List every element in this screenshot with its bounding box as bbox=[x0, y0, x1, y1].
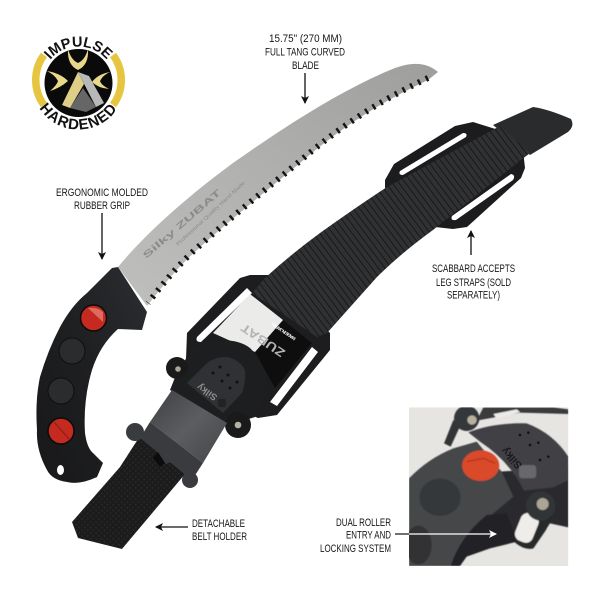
label: blade: 15.75" (270 MM) bbox=[269, 33, 342, 45]
badge: impulse hardened: HARDENED bbox=[40, 102, 115, 130]
label: belt holder: BELT HOLDER bbox=[192, 531, 247, 543]
ribbed body bbox=[252, 126, 530, 337]
inset photo: roller system: Silky bbox=[499, 444, 525, 471]
roller rivet right bbox=[225, 412, 251, 438]
red screw bottom bbox=[48, 418, 74, 444]
label: roller system bbox=[320, 517, 391, 555]
rubber button upper bbox=[59, 338, 85, 364]
badge: impulse hardened bbox=[32, 36, 125, 130]
rivet right centre bbox=[235, 422, 241, 428]
lower frame loops bbox=[185, 275, 330, 418]
blade engraving: Professional Quality Hand Made bbox=[175, 180, 247, 247]
label: blade: BLADE bbox=[292, 60, 319, 72]
arrow: blade bbox=[304, 73, 306, 103]
belt clip frame bbox=[126, 422, 203, 488]
label: roller system: LOCKING SYSTEM bbox=[320, 543, 391, 555]
throat small print: MADE IN JAPAN bbox=[271, 322, 297, 341]
roller rivet left bbox=[166, 357, 188, 379]
rubber button lower bbox=[48, 378, 74, 404]
housing lettering: Silky bbox=[195, 380, 220, 403]
lanyard hole bbox=[57, 465, 64, 475]
upper strap loop bbox=[385, 122, 505, 192]
metal throat dark part bbox=[255, 320, 312, 388]
arrow: roller system bbox=[395, 533, 496, 535]
label: belt holder: DETACHABLE bbox=[192, 518, 245, 530]
inset photo: roller system bbox=[405, 406, 568, 566]
label: grip: RUBBER GRIP bbox=[74, 200, 130, 212]
badge: impulse hardened: IMPULSE bbox=[44, 36, 114, 60]
label: leg straps: SEPARATELY) bbox=[447, 290, 500, 302]
metal throat bright part bbox=[213, 294, 283, 352]
arrow: belt holder bbox=[156, 526, 188, 528]
label: grip bbox=[56, 187, 148, 212]
handle grip bbox=[36, 267, 147, 483]
grey lock cover bbox=[150, 390, 227, 463]
housing label panel bbox=[187, 357, 245, 413]
detachable belt holder bbox=[72, 422, 203, 549]
black dome housing bbox=[170, 340, 267, 425]
scabbard bbox=[150, 107, 572, 463]
blade engraving: Silky ZUBAT bbox=[141, 187, 223, 261]
label: grip: ERGONOMIC MOLDED bbox=[56, 187, 148, 199]
label: belt holder bbox=[192, 518, 247, 543]
label: leg straps bbox=[432, 263, 515, 302]
blade teeth bbox=[148, 78, 428, 303]
label: blade: FULL TANG CURVED bbox=[265, 46, 345, 58]
label: roller system: DUAL ROLLER bbox=[336, 517, 391, 529]
label: blade bbox=[265, 33, 345, 72]
lower strap loop bbox=[435, 150, 525, 229]
housing dots bbox=[212, 366, 238, 407]
blade engraving bbox=[141, 180, 247, 261]
red screw top bbox=[80, 305, 106, 331]
scabbard tip bbox=[493, 107, 572, 155]
saw blade bbox=[118, 64, 438, 306]
throat lettering: ZUBAT bbox=[238, 320, 288, 360]
label: roller system: ENTRY AND bbox=[346, 530, 391, 542]
label: leg straps: SCABBARD ACCEPTS bbox=[432, 263, 515, 275]
label: leg straps: LEG STRAPS (SOLD bbox=[436, 277, 511, 289]
arrow: grip bbox=[101, 213, 103, 259]
rivet left centre bbox=[175, 366, 181, 372]
arrow: leg straps bbox=[470, 231, 472, 255]
